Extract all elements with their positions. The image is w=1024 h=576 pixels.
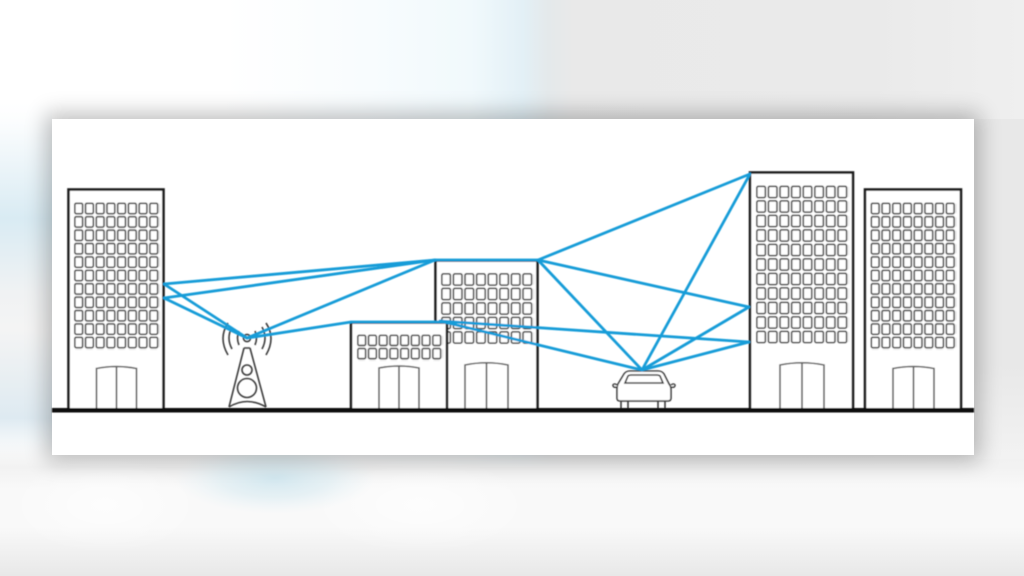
- building 3: [351, 322, 447, 410]
- panel: white illustration card: [52, 119, 974, 455]
- building 5: [750, 172, 853, 410]
- ground line: [52, 408, 974, 412]
- building 6: [865, 190, 961, 410]
- building 4: [436, 260, 538, 410]
- icon: car: [613, 371, 675, 408]
- icon: cell tower: [223, 323, 271, 407]
- building 1: [68, 190, 164, 410]
- panel shadow: [46, 113, 980, 461]
- signal paths: [164, 174, 750, 370]
